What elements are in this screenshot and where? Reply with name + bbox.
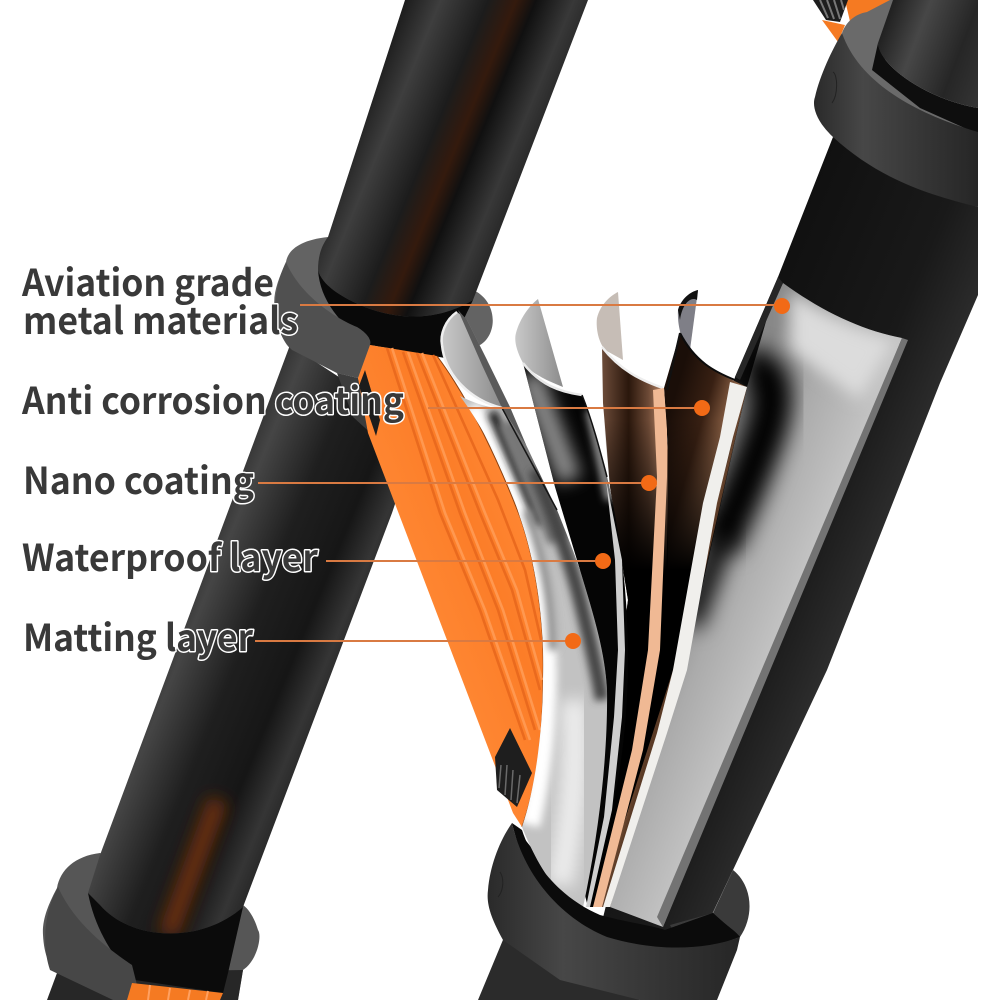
bottom-right tube segment — [478, 935, 640, 1000]
leader line: waterproof — [326, 560, 602, 562]
upper-left collar back disk — [274, 237, 493, 378]
top-right rung end — [813, 0, 895, 42]
layer 4: black waterproof sheet — [515, 299, 626, 907]
lower rung clip — [495, 728, 532, 807]
label: Aviation grade metal materials: Aviation grade — [21, 253, 274, 307]
leader line: nano — [258, 482, 649, 484]
bottom-left tube dark base — [88, 893, 243, 993]
upper-left tube dark base — [318, 270, 473, 358]
bottom rung — [127, 983, 223, 1000]
lower-left tube — [88, 345, 420, 933]
upper rung clip — [359, 370, 380, 436]
rung right edge — [437, 356, 543, 827]
leader line: aviation — [300, 304, 778, 306]
bottom-right hole — [512, 823, 740, 955]
rung ribs dark — [387, 348, 541, 740]
rung ribs light — [392, 348, 542, 740]
leader line: anti corrosion — [428, 407, 703, 409]
inner face — [597, 292, 623, 360]
collar mark — [498, 872, 503, 897]
bottom-right collar back disk — [670, 870, 750, 945]
white edge strip — [603, 382, 747, 907]
orange ladder rung — [358, 345, 543, 827]
layer 5: silver matting sheet — [442, 310, 620, 920]
top-right collar back surface — [842, 0, 978, 145]
back edge — [458, 310, 560, 520]
grey edge strip — [586, 480, 625, 907]
right lower tube — [600, 137, 978, 940]
top-right collar front band — [814, 33, 978, 207]
layer 1: silver outer cover — [607, 280, 908, 927]
inner face — [678, 290, 698, 350]
label: Waterproof layer: Waterproof layer — [22, 528, 319, 582]
collar mark — [832, 72, 837, 103]
layer 3: copper nano sheet — [587, 292, 668, 907]
bottom-left tube lower segment — [47, 970, 243, 1000]
label: Matting layer: Matting layer — [23, 608, 254, 662]
label: Aviation grade metal materials — [21, 253, 298, 345]
label: Anti corrosion coating: Anti corrosion coating — [21, 371, 404, 425]
top-right tube dark base — [872, 43, 978, 134]
inner face — [515, 299, 563, 387]
label: Nano coating: Nano coating — [23, 451, 254, 505]
layer 2: brown anti-corrosion sheet — [597, 290, 747, 907]
leader line: matting — [255, 640, 573, 642]
bottom-left collar front band — [45, 887, 223, 1000]
copper strip — [593, 388, 667, 907]
top-right tube segment — [878, 0, 978, 108]
collar tab — [337, 373, 375, 437]
silver frame strip — [657, 338, 908, 927]
lower tube orange reflection — [168, 800, 218, 935]
bottom-right collar front band — [488, 823, 740, 1000]
label: Aviation grade metal materials: metal materials — [23, 291, 298, 345]
upper-left collar front band — [275, 262, 375, 437]
marker dots — [565, 298, 790, 649]
silver cover dark edge — [735, 277, 783, 380]
inner face — [442, 312, 502, 408]
bottom-left collar back disk — [43, 853, 259, 1000]
upper-left tube — [318, 0, 588, 316]
